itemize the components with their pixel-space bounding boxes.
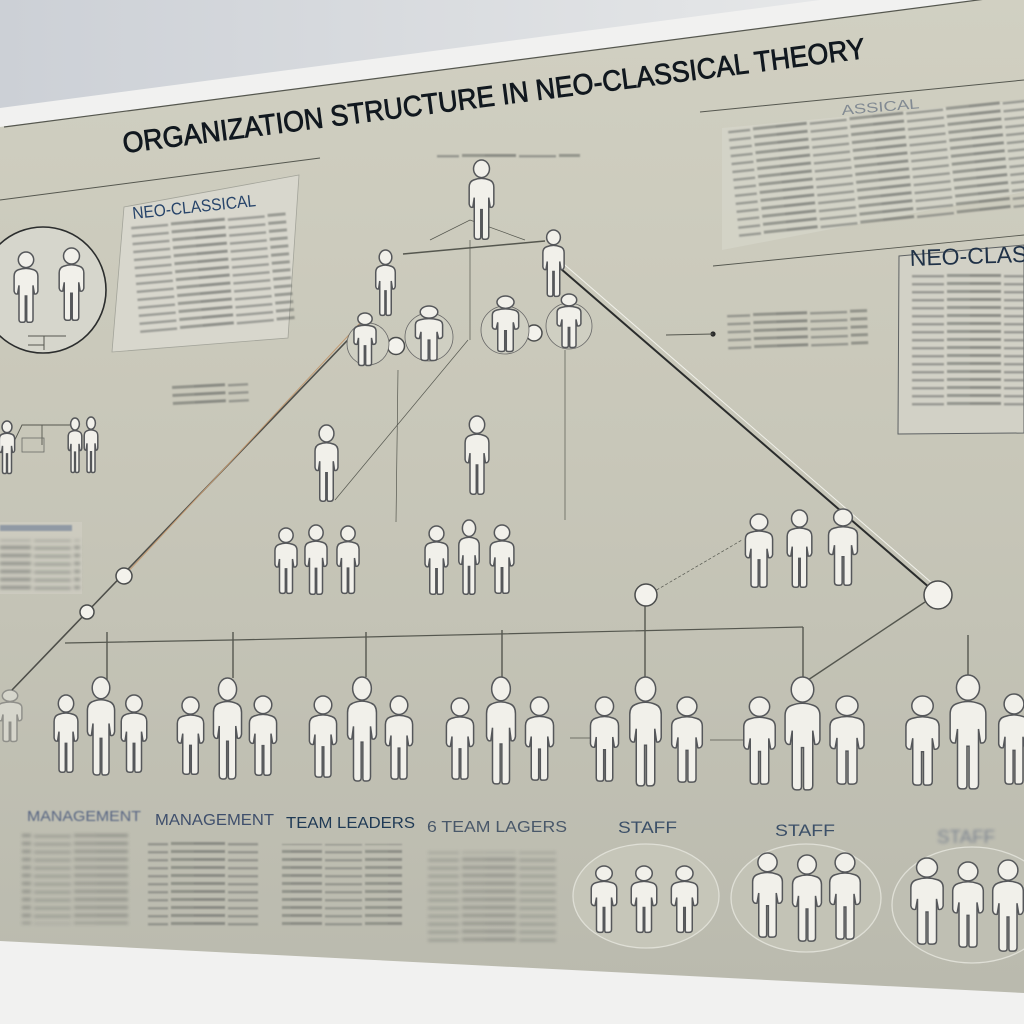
label: staff 3: STAFF — [937, 827, 995, 847]
connector lines — [12, 220, 968, 740]
right divider — [713, 235, 1024, 266]
text: management 1 — [22, 832, 128, 924]
left small text — [172, 382, 249, 410]
people: center group — [425, 520, 514, 594]
left small org diagram — [0, 417, 98, 473]
label: management 1: MANAGEMENT — [27, 808, 141, 825]
text: management 2 — [148, 842, 258, 926]
text: team leaders — [282, 844, 402, 930]
left lower text block — [0, 522, 82, 594]
header divider — [0, 80, 1024, 200]
people: third tier circled — [347, 294, 592, 365]
people: right group — [745, 509, 857, 587]
people: team 4 — [446, 677, 554, 784]
people: faded left edge figure — [0, 690, 22, 741]
connector nodes — [80, 325, 952, 619]
staff group 2 — [731, 844, 881, 952]
panel body text lines — [130, 212, 295, 334]
panel: left circle with two people — [0, 227, 106, 353]
people: team 6 — [744, 677, 864, 790]
people: team 7 — [906, 675, 1024, 789]
people: second tier — [376, 230, 564, 315]
text block: middle right callout — [666, 307, 868, 354]
body text lines — [728, 98, 1024, 241]
panel body text lines — [912, 272, 1024, 406]
people: team 5 — [590, 677, 702, 786]
label: staff 1: STAFF — [618, 818, 677, 837]
poster top edge — [4, 0, 1024, 127]
panel: right neo-classical — [898, 239, 1024, 434]
label: team leaders: TEAM LEADERS — [286, 815, 415, 832]
title: ORGANIZATION STRUCTURE IN NEO-CLASSICAL THEORY — [121, 33, 867, 160]
people: team 1 — [54, 677, 147, 775]
top caption — [437, 154, 580, 162]
staff group 1 — [573, 844, 719, 948]
label: team leaders 2: 6 TEAM LAGERS — [427, 819, 567, 836]
faded heading: ASSICAL — [841, 95, 920, 118]
label: staff 2: STAFF — [775, 821, 835, 840]
people: left group — [275, 525, 359, 594]
people: team 2 — [177, 678, 277, 779]
person: top executive — [469, 160, 494, 239]
text block: top right — [722, 95, 1024, 250]
people: middle managers — [315, 416, 489, 501]
panel heading: NEO-CLASSICAL — [131, 191, 257, 223]
panel: neo-classical text — [112, 175, 299, 352]
staff group 3 — [892, 847, 1024, 963]
people: team 3 — [309, 677, 413, 781]
label: management 2: MANAGEMENT — [155, 812, 275, 829]
text: team leaders 2 — [428, 852, 558, 942]
